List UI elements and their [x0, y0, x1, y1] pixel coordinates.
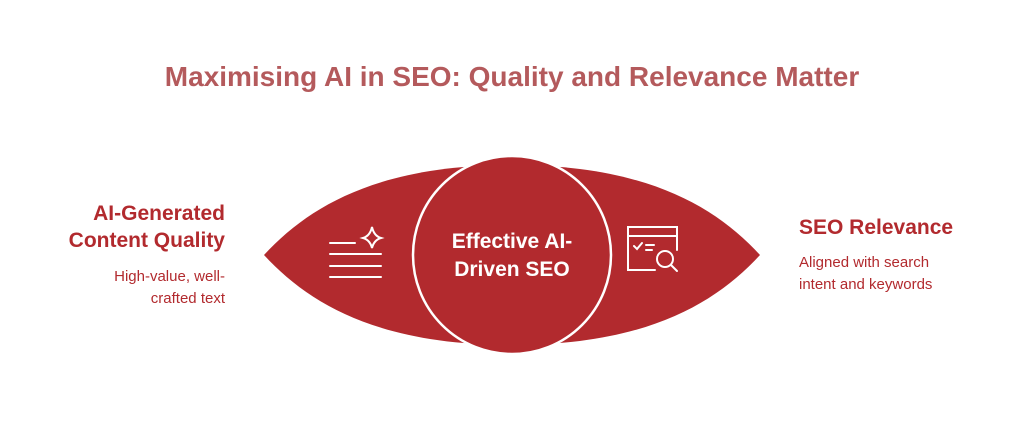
left description [114, 268, 225, 307]
left heading [69, 202, 225, 252]
left block [69, 202, 225, 307]
icon: text sparkle [330, 227, 381, 277]
right description: intent and keywords [799, 276, 932, 293]
left lens [264, 165, 512, 345]
right heading: SEO Relevance [799, 216, 953, 239]
center label: Driven SEO [454, 258, 570, 281]
center circle [413, 156, 611, 354]
right lens [512, 165, 760, 345]
center label: Effective AI- [452, 230, 572, 253]
left heading: AI-Generated [93, 202, 225, 225]
right description [799, 254, 932, 293]
right description: Aligned with search [799, 254, 929, 271]
center label [452, 230, 572, 281]
title: Maximising AI in SEO: Quality and Relevance Matter [165, 61, 859, 92]
right block [799, 216, 953, 293]
icon: browser search [628, 227, 677, 271]
left description: High-value, well- [114, 268, 225, 285]
left heading: Content Quality [69, 229, 225, 252]
left description: crafted text [151, 290, 225, 307]
